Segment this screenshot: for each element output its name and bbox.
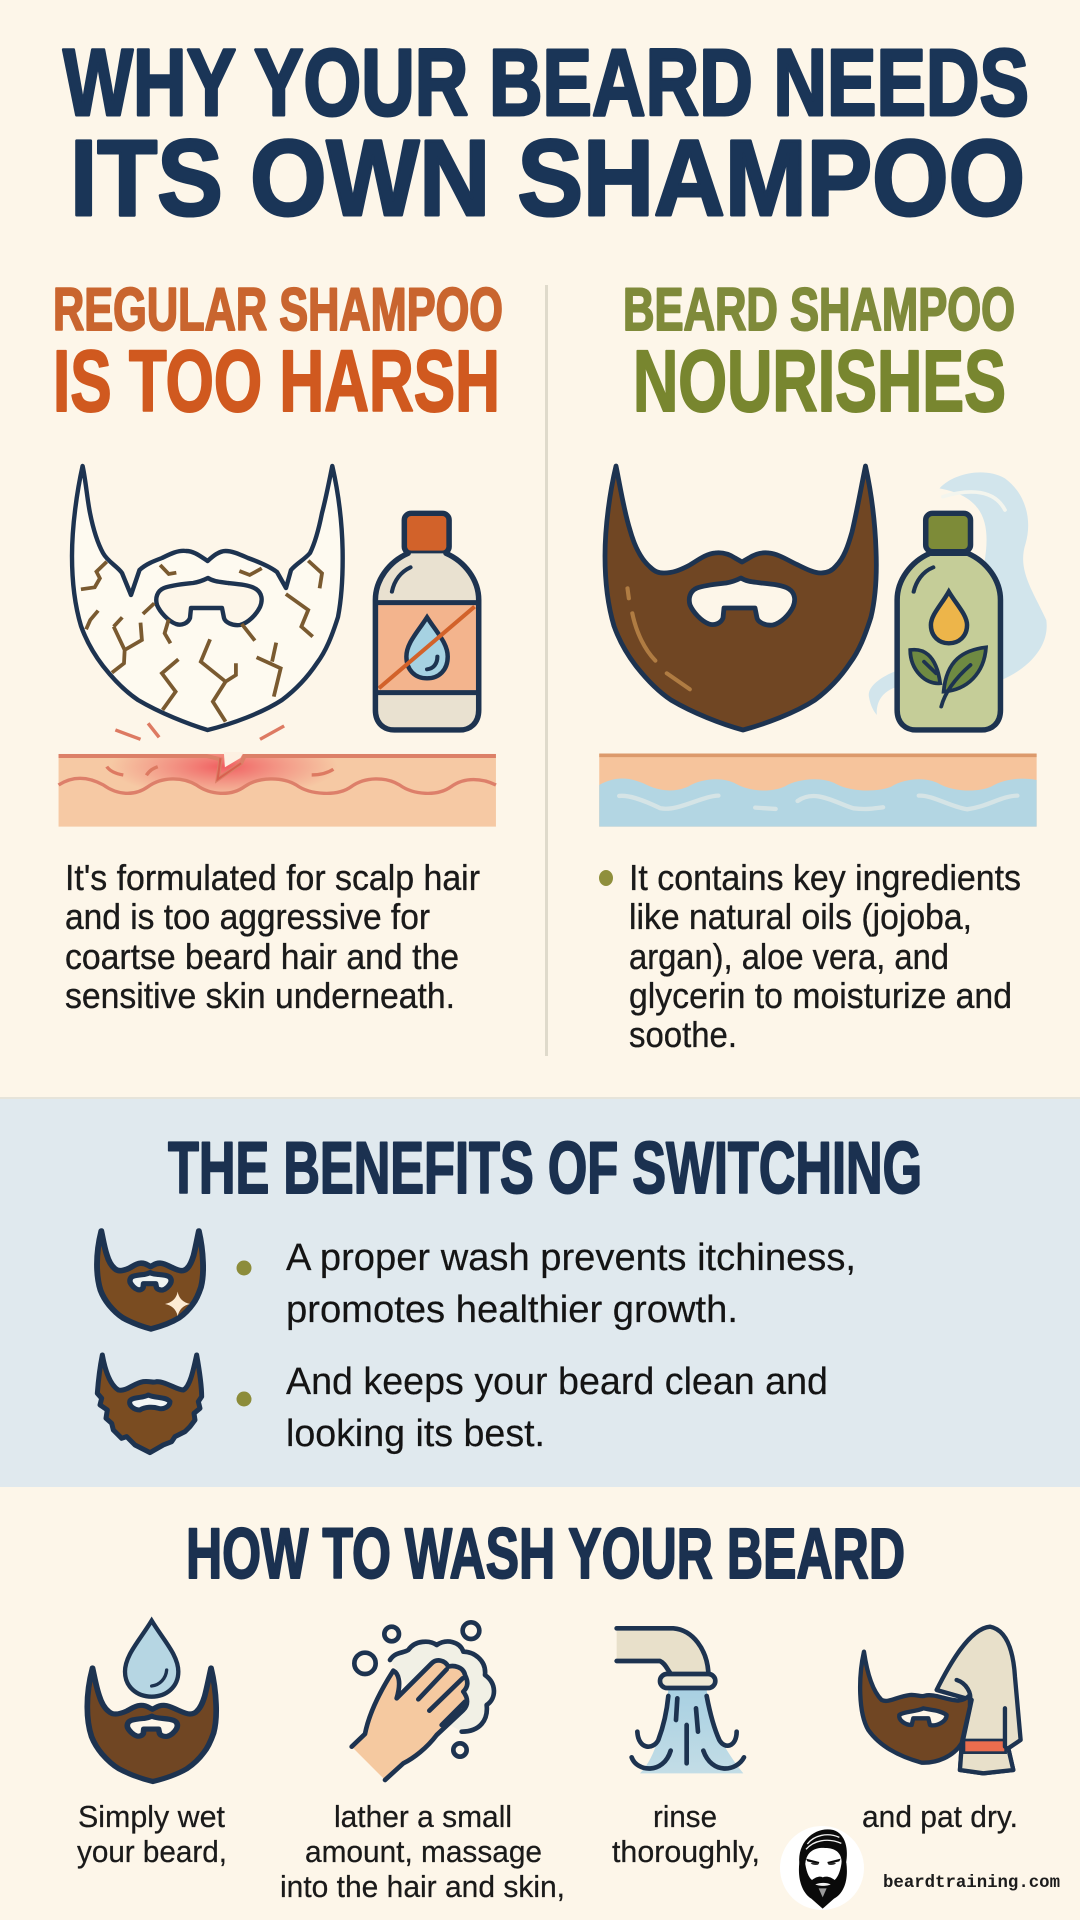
text: beard shampoo description: like natural oils (jojoba, xyxy=(629,896,972,937)
step: lather and massage xyxy=(280,1622,565,1904)
heading: regular shampoo is too harsh xyxy=(53,276,503,430)
icon: irritated skin xyxy=(59,723,496,827)
text: benefit two xyxy=(286,1361,828,1455)
step: wet your beard xyxy=(77,1621,227,1869)
step: pat dry xyxy=(860,1627,1021,1834)
text: regular shampoo description: sensitive skin underneath. xyxy=(65,975,455,1016)
text: step three xyxy=(612,1799,760,1869)
text: benefit two: looking its best. xyxy=(286,1413,545,1455)
heading: regular shampoo is too harsh: REGULAR SHAMPOO xyxy=(53,276,503,343)
icon: dry cracked beard xyxy=(72,466,343,730)
text: regular shampoo description: and is too aggressive for xyxy=(65,896,430,937)
text: beard shampoo description: It contains key ingredients xyxy=(629,857,1021,898)
text: step one: your beard, xyxy=(77,1834,227,1869)
text: step one xyxy=(77,1799,227,1869)
text: benefit one xyxy=(286,1237,856,1331)
step: rinse thoroughly xyxy=(612,1628,760,1869)
text: step two: into the hair and skin, xyxy=(280,1869,565,1904)
icon: full healthy beard xyxy=(97,1355,202,1453)
text: beard shampoo description: soothe. xyxy=(629,1014,737,1055)
icon: healthy beard xyxy=(605,466,876,730)
icon: nourishing bottle with water swirl xyxy=(869,472,1047,730)
bullet xyxy=(236,1392,252,1406)
bullet xyxy=(236,1260,252,1276)
text: step two xyxy=(280,1799,565,1904)
icon: beard with towel xyxy=(860,1627,1021,1773)
panel: beard shampoo xyxy=(599,276,1047,1055)
text: regular shampoo description: coartse beard hair and the xyxy=(65,936,459,977)
text: beardtraining.com: beardtraining.com xyxy=(883,1874,1060,1893)
icon: hydrated skin xyxy=(599,754,1037,827)
icon: harsh shampoo bottle xyxy=(375,513,479,730)
icon: shiny beard xyxy=(97,1231,203,1329)
text: regular shampoo description xyxy=(65,857,480,1016)
text: beard shampoo description: argan), aloe vera, and xyxy=(629,936,949,977)
panel: benefits of switching xyxy=(0,1097,1080,1487)
text: step two: amount, massage xyxy=(305,1834,542,1869)
text: benefit one: promotes healthier growth. xyxy=(286,1289,738,1331)
icon: water drop over beard xyxy=(87,1621,216,1782)
icon: hand with lather xyxy=(352,1622,494,1780)
heading: regular shampoo is too harsh: IS TOO HARSH xyxy=(53,333,500,430)
text: beard shampoo description: glycerin to moisturize and xyxy=(629,975,1012,1016)
text: regular shampoo description: It's formulated for scalp hair xyxy=(65,857,480,898)
panel: regular shampoo xyxy=(53,276,503,1016)
text: benefit one: A proper wash prevents itchiness, xyxy=(286,1237,856,1279)
text: step three: thoroughly, xyxy=(612,1834,760,1869)
heading: beard shampoo nourishes xyxy=(623,276,1015,430)
text: benefit two: And keeps your beard clean and xyxy=(286,1361,828,1403)
text: beard shampoo description xyxy=(629,857,1021,1055)
bullet xyxy=(599,870,613,886)
text: step one: Simply wet xyxy=(78,1799,225,1834)
text: step four: and pat dry. xyxy=(862,1799,1018,1834)
panel: how to wash your beard xyxy=(77,1515,1021,1904)
text: step three: rinse xyxy=(653,1799,717,1834)
logo: bearded man xyxy=(780,1826,864,1910)
title xyxy=(63,30,1029,238)
icon: faucet with water xyxy=(617,1628,744,1773)
text: step two: lather a small xyxy=(334,1799,512,1834)
